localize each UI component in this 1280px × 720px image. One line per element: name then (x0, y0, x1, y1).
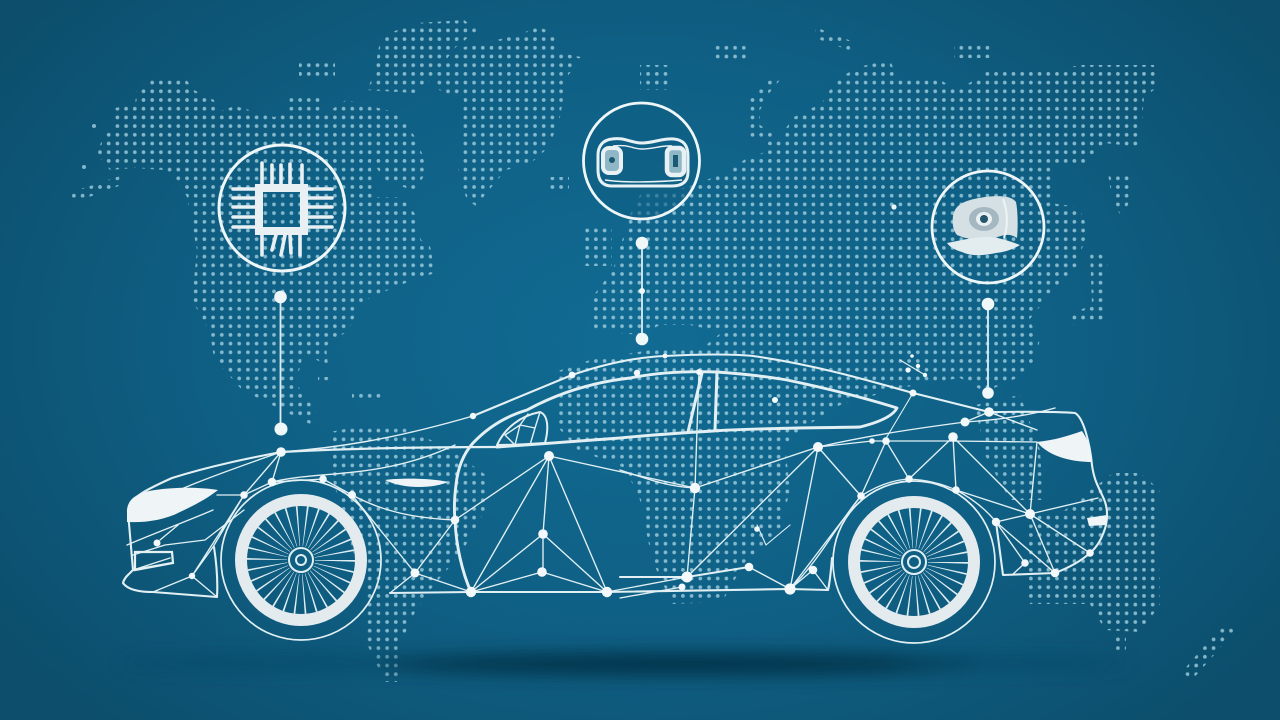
windshield reflection mesh (497, 412, 547, 445)
icon: camera eye in circle (932, 171, 1044, 283)
tail light (1037, 431, 1092, 462)
rear wheel (854, 502, 974, 622)
front grille (135, 552, 173, 570)
rear reflector (1087, 515, 1107, 526)
rear wheel arch (833, 481, 995, 643)
window and pillar lines (281, 372, 897, 592)
ground shadow under car (120, 653, 1130, 675)
connector: sensor module to car (636, 237, 648, 345)
side mirror sliver (385, 479, 448, 487)
connector: camera to car (982, 298, 994, 399)
icon: sensor module in circle (584, 103, 700, 219)
headlight (127, 488, 218, 522)
network mesh lines (127, 360, 1098, 598)
icon: microchip in circle (219, 145, 345, 271)
front wheel (241, 500, 361, 620)
car body outline (123, 354, 1107, 597)
car wireframe (123, 354, 1107, 643)
network nodes (154, 354, 1094, 597)
front wheel arch (221, 480, 381, 640)
connector: chip to car (274, 291, 288, 436)
lone map node (891, 204, 897, 210)
